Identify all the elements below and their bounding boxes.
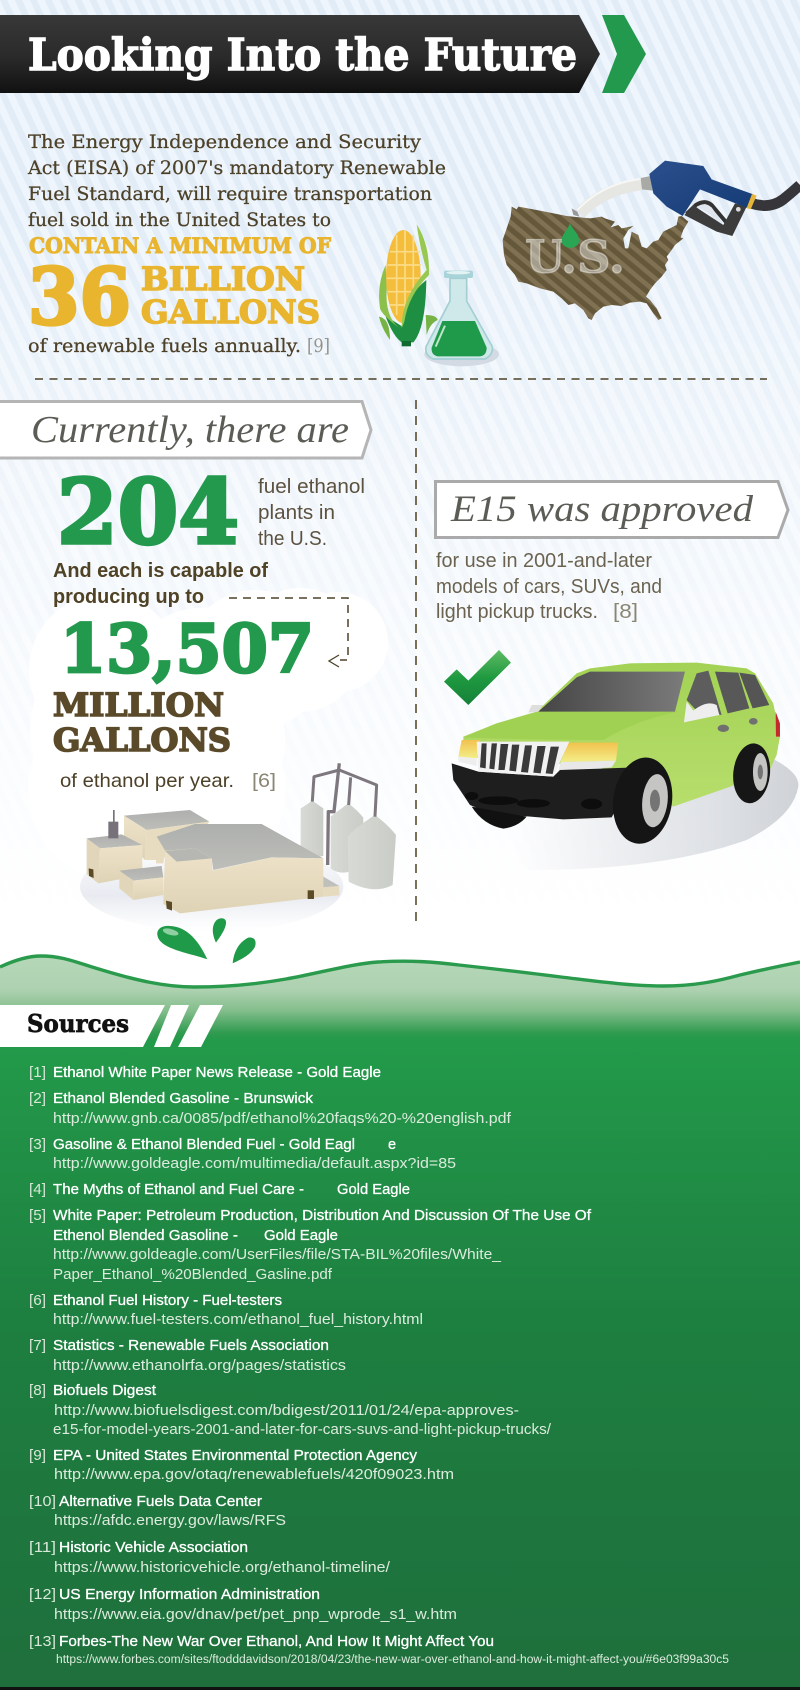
sources list: http://www.fuel-testers.com/ethanol_fuel_history.html <box>53 1312 423 1328</box>
sources list: Gold Eagle <box>337 1182 410 1198</box>
text: E15 approval details: for use in 2001-and-later <box>436 550 652 572</box>
stat: 13,507 million gallons: MILLION <box>53 686 224 724</box>
banner: E15 was approved: E15 was approved <box>450 489 754 530</box>
banner: Currently, there are: Currently, there are <box>31 409 349 451</box>
text: E15 approval details: [8] <box>613 601 638 623</box>
sources list: [6] <box>29 1293 46 1309</box>
sources list: Gasoline & Ethanol Blended Fuel - Gold Eagl <box>53 1137 355 1153</box>
stat: 204 fuel ethanol plants <box>57 459 365 564</box>
sources list: [3] <box>29 1137 46 1153</box>
sources list: https://afdc.energy.gov/laws/RFS <box>54 1513 286 1529</box>
back building <box>124 810 209 860</box>
stat: 13,507 million gallons: GALLONS <box>53 721 231 759</box>
sources list: https://www.forbes.com/sites/ftodddavidson/2018/04/23/the-new-war-over-ethanol-and-how-it-might-affect-you/#6e03f99a30c5 <box>56 1654 729 1666</box>
icon: U.S. map with fuel nozzle: U.S. <box>525 230 625 284</box>
icon: green droplets <box>157 918 256 963</box>
sources list: http://www.epa.gov/otaq/renewablefuels/420f09023.htm <box>54 1467 454 1483</box>
sources list: Forbes-The New War Over Ethanol, And How It Might Affect You <box>59 1634 494 1650</box>
sources list: [10] <box>29 1494 56 1510</box>
sources list: Alternative Fuels Data Center <box>59 1494 262 1510</box>
banner: Currently, there are <box>0 402 371 458</box>
text: E15 approval details: models of cars, SUVs, and <box>436 576 662 598</box>
car <box>452 663 780 848</box>
sources list: Gold Eagle <box>264 1228 338 1244</box>
sources list: e15-for-model-years-2001-and-later-for-cars-suvs-and-light-pickup-trucks/ <box>53 1422 552 1438</box>
sources list: https://www.historicvehicle.org/ethanol-timeline/ <box>54 1560 391 1576</box>
sources list: http://www.gnb.ca/0085/pdf/ethanol%20faqs%20-%20english.pdf <box>53 1111 512 1127</box>
sources list: Paper_Ethanol_%20Blended_Gasline.pdf <box>53 1267 333 1283</box>
callout: 36 billion gallons: CONTAIN A MINIMUM OF <box>29 233 331 258</box>
sources list <box>29 1065 729 1666</box>
text: each is capable of producing <box>53 560 268 608</box>
callout: 36 billion gallons: BILLION <box>141 260 305 298</box>
section divider <box>35 378 767 380</box>
text: E15 approval details: light pickup trucks. <box>436 601 598 623</box>
white cloud backdrop <box>28 588 388 882</box>
intro text block: fuel sold in the United States to <box>28 209 331 231</box>
side blocks <box>87 810 339 911</box>
main building <box>156 824 323 913</box>
intro text block: The Energy Independence and Security <box>28 131 421 153</box>
intro text block: Act (EISA) of 2007's mandatory Renewable <box>27 157 446 179</box>
sources list: Ethanol White Paper News Release - Gold Eagle <box>53 1065 381 1081</box>
sources list: Ethanol Blended Gasoline - Brunswick <box>53 1091 314 1107</box>
text: each is capable of producing: producing up to <box>53 586 204 608</box>
sources list: [2] <box>29 1091 46 1107</box>
intro text block <box>27 131 446 231</box>
sources list: [7] <box>29 1338 46 1354</box>
stat: 204 fuel ethanol plants: fuel ethanol <box>258 475 365 498</box>
illustration: check mark and car <box>444 650 798 870</box>
text: ethanol per year: [6] <box>252 770 276 792</box>
icon: U.S. map with fuel nozzle <box>503 161 800 320</box>
sources list: http://www.biofuelsdigest.com/bdigest/2011/01/24/epa-approves- <box>54 1403 519 1419</box>
sources heading <box>0 1005 223 1047</box>
callout: 36 billion gallons: 36 <box>28 252 131 343</box>
sources list: e <box>388 1137 396 1153</box>
car shadow <box>512 760 798 870</box>
illustration: ethanol plant <box>80 763 396 932</box>
stat: 13,507 million gallons: 13,507 <box>60 610 314 688</box>
sources list: [5] <box>29 1208 46 1224</box>
stat: 204 fuel ethanol plants: plants in <box>258 501 335 524</box>
sources list: Statistics - Renewable Fuels Association <box>53 1338 329 1354</box>
sources list: Ethenol Blended Gasoline - <box>53 1228 238 1244</box>
icon: corn and flask <box>379 224 499 366</box>
map of the United States <box>503 207 688 320</box>
sources list: http://www.goldeagle.com/UserFiles/file/STA-BIL%20files/White_ <box>53 1247 502 1263</box>
title: Looking Into the Future <box>28 30 577 81</box>
intro text block: Fuel Standard, will require transportation <box>28 183 432 205</box>
sources list: [11] <box>29 1540 56 1556</box>
sources list: [8] <box>29 1383 46 1399</box>
text: E15 approval details <box>436 550 662 623</box>
text: each is capable of producing: And each is capable of <box>53 560 268 582</box>
text: ethanol per year: of ethanol per year. <box>60 770 234 792</box>
sources list: Ethanol Fuel History - Fuel-testers <box>53 1293 282 1309</box>
silos <box>301 763 396 889</box>
text: renewable fuels annually: of renewable fuels annually. <box>28 335 301 357</box>
callout: 36 billion gallons <box>28 233 331 343</box>
sources list: http://www.goldeagle.com/multimedia/default.aspx?id=85 <box>53 1156 456 1172</box>
stat: 204 fuel ethanol plants: 204 <box>57 459 239 564</box>
icon: check mark <box>444 650 511 705</box>
sources list: EPA - United States Environmental Protection Agency <box>53 1448 418 1464</box>
panel: sources <box>0 956 800 1690</box>
callout: 36 billion gallons: GALLONS <box>141 293 320 331</box>
icon: green chevron <box>602 15 646 93</box>
text: renewable fuels annually: [9] <box>307 335 330 357</box>
sources list: The Myths of Ethanol and Fuel Care - <box>53 1182 304 1198</box>
banner: E15 was approved <box>436 482 788 538</box>
sources list: [13] <box>29 1634 56 1650</box>
stat: 204 fuel ethanol plants: the U.S. <box>258 527 327 550</box>
sources list: [9] <box>29 1448 46 1464</box>
sources list: [4] <box>29 1182 46 1198</box>
arrow: dashed route <box>229 598 348 667</box>
sources list: US Energy Information Administration <box>59 1587 320 1603</box>
title banner <box>0 15 600 93</box>
sources list: Biofuels Digest <box>53 1383 156 1399</box>
sources list: [12] <box>29 1587 56 1603</box>
sources list: http://www.ethanolrfa.org/pages/statistics <box>53 1358 346 1374</box>
sources list: White Paper: Petroleum Production, Distribution And Discussion Of The Use Of <box>53 1208 592 1224</box>
sources heading: Sources <box>27 1009 129 1038</box>
stat: 13,507 million gallons <box>53 610 314 759</box>
sources list: Historic Vehicle Association <box>59 1540 248 1556</box>
sources list: https://www.eia.gov/dnav/pet/pet_pnp_wprode_s1_w.htm <box>54 1607 457 1623</box>
sources list: [1] <box>29 1065 46 1081</box>
